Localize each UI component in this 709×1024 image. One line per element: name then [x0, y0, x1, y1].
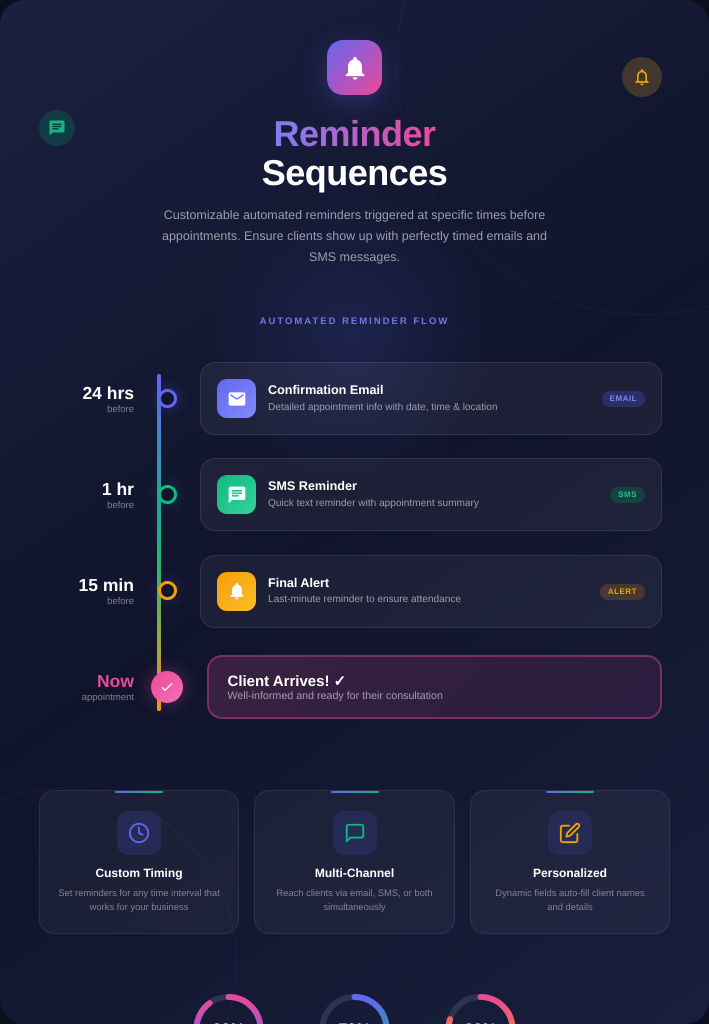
timeline dot: 24 hrs	[158, 389, 176, 408]
card: client arrives	[206, 654, 662, 719]
arrival title: Client Arrives! ✓	[228, 672, 346, 690]
description: appointments. Ensure clients show up with perfectly timed emails and	[162, 229, 547, 243]
description: Customizable automated reminders triggered at specific times before	[164, 208, 545, 222]
description: SMS messages.	[309, 250, 400, 264]
accent bar	[546, 791, 594, 793]
check circle	[151, 671, 183, 703]
arrival text: Well-informed and ready for their consultation	[228, 690, 443, 702]
feature title: Personalized	[533, 866, 607, 880]
time label: 15 min: 15 min	[79, 575, 134, 595]
time label: 1 hr	[102, 479, 134, 510]
time label: 15 min	[79, 575, 134, 606]
card: final alert	[200, 554, 662, 628]
title	[262, 113, 447, 193]
ring: 90%	[196, 997, 260, 1024]
feature title: Multi-Channel	[315, 866, 394, 880]
timeline line	[157, 374, 161, 711]
time label: 1 hr: 1 hr	[102, 479, 134, 499]
feature title: Custom Timing	[95, 866, 183, 880]
icon: email	[217, 379, 256, 418]
time label: now	[82, 671, 134, 702]
badge: email: EMAIL	[610, 394, 637, 403]
description	[162, 208, 547, 264]
title: Sequences	[262, 152, 447, 193]
time label: 15 min: before	[107, 596, 134, 606]
time label: 24 hrs: before	[107, 404, 134, 414]
ring: 80%	[448, 997, 512, 1024]
title: Reminder	[273, 113, 436, 154]
time label: now: Now	[97, 671, 134, 691]
badge: sms	[610, 487, 645, 503]
icon: edit	[548, 811, 592, 855]
section label: AUTOMATED REMINDER FLOW	[260, 316, 449, 327]
card title: Confirmation Email	[268, 383, 383, 397]
floating icon: chat	[39, 110, 75, 146]
time label: 1 hr: before	[107, 500, 134, 510]
timeline dot: 15 min	[158, 581, 176, 600]
icon: sms	[217, 475, 256, 514]
timeline dot: 1 hr	[158, 485, 176, 504]
badge: alert	[600, 584, 645, 600]
header icon: bell	[327, 40, 382, 95]
badge: sms: SMS	[618, 490, 637, 499]
feature: custom timing	[39, 790, 239, 934]
feature text: Set reminders for any time interval that works for your business	[58, 887, 220, 912]
floating icon: bell	[622, 57, 662, 97]
feature text: Dynamic fields auto-fill client names and details	[495, 887, 645, 912]
card text: Last-minute reminder to ensure attendance	[268, 594, 461, 605]
card title: SMS Reminder	[268, 479, 357, 493]
icon: clock	[117, 811, 161, 855]
accent bar	[330, 791, 378, 793]
icon: chat	[332, 811, 376, 855]
card: confirmation email	[200, 362, 662, 435]
card text: Detailed appointment info with date, time & location	[268, 402, 498, 412]
card title: Final Alert	[268, 576, 329, 590]
icon: alert	[217, 572, 256, 610]
accent bar	[115, 791, 163, 793]
feature: personalized	[470, 790, 670, 934]
ring: 70%	[322, 997, 386, 1024]
badge: alert: ALERT	[608, 586, 637, 596]
badge: email	[602, 391, 645, 407]
stat rings	[194, 994, 516, 1024]
time label: 24 hrs	[82, 383, 134, 414]
card text: Quick text reminder with appointment summary	[268, 498, 479, 508]
card: sms reminder	[200, 458, 662, 531]
feature text: Reach clients via email, SMS, or both simultaneously	[276, 887, 433, 912]
feature: multi-channel	[254, 790, 455, 934]
time label: now: appointment	[82, 692, 134, 702]
time label: 24 hrs: 24 hrs	[82, 383, 134, 403]
